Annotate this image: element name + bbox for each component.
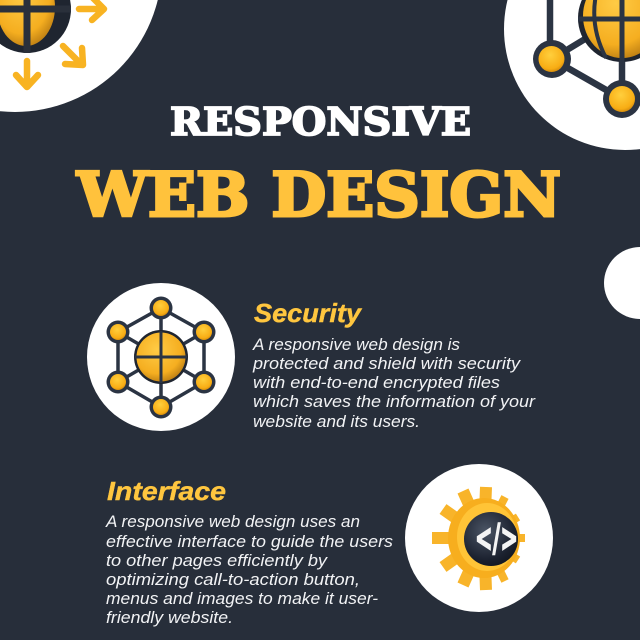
heading: interface: Interface xyxy=(107,476,226,506)
decorative circle: top left with globe and arrows xyxy=(0,0,162,112)
text block: interface description: to other pages efficiently by xyxy=(106,552,329,570)
title line: web design: WEB DESIGN xyxy=(76,160,561,231)
text block: interface description: menus and images to make it user- xyxy=(106,590,379,608)
decorative circle: top right with network xyxy=(504,0,640,150)
icon: globe top left xyxy=(0,0,71,53)
panel: security xyxy=(87,283,537,431)
code symbol: </> xyxy=(475,516,518,560)
icon: bottom network node xyxy=(603,80,640,118)
decorative circle: right edge xyxy=(604,247,640,319)
icon: arrows pointing outward xyxy=(16,0,104,87)
network links xyxy=(550,0,622,99)
text block: security description: which saves the information of your xyxy=(253,393,537,411)
text block: interface description: friendly website. xyxy=(106,609,233,627)
icon: security network globe xyxy=(87,283,235,431)
title line: responsive: RESPONSIVE xyxy=(170,99,471,144)
panel: interface xyxy=(105,464,553,627)
text block: security description: with end-to-end encrypted files xyxy=(253,374,500,392)
text block: interface description xyxy=(105,513,393,627)
text block: security description: A responsive web design is xyxy=(252,336,460,354)
text block: interface description: A responsive web design uses an xyxy=(105,513,360,531)
title xyxy=(76,99,561,231)
text block: interface description: optimizing call-to-action button, xyxy=(106,571,360,589)
text block: interface description: effective interface to guide the users xyxy=(106,533,393,551)
text block: security description: protected and shield with security xyxy=(252,355,522,373)
icon: left network node xyxy=(533,40,571,78)
text block: security description: website and its users. xyxy=(253,413,420,431)
heading: security: Security xyxy=(254,298,363,328)
icon: globe top right xyxy=(578,0,640,62)
text block: security description xyxy=(252,336,537,431)
icon: code gear xyxy=(405,464,553,612)
